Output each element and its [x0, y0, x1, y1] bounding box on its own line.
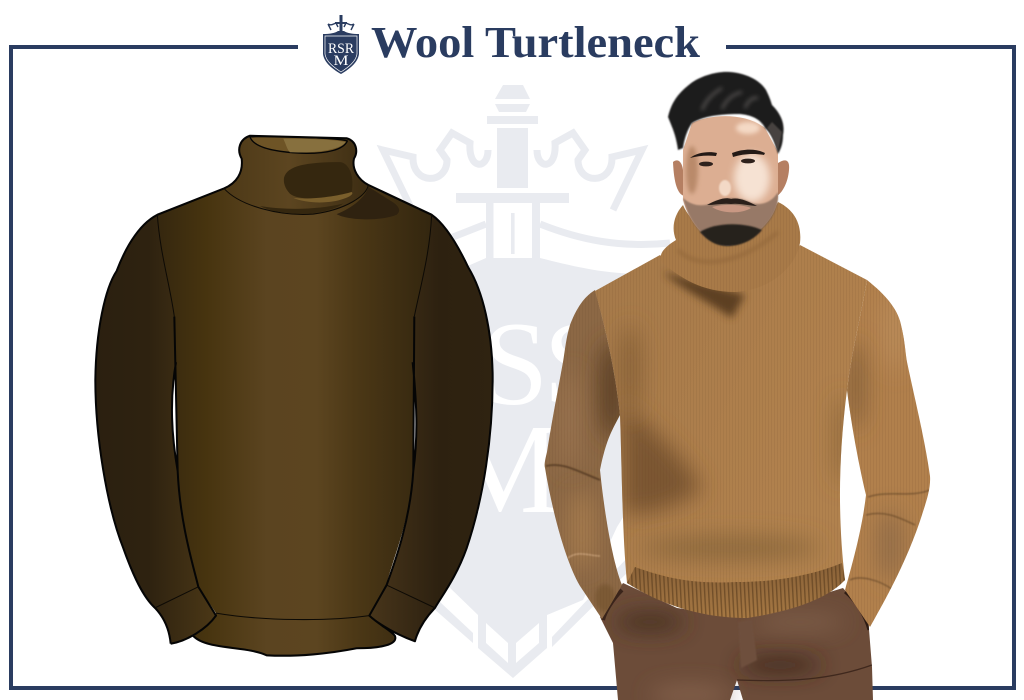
ribbed hem: [627, 563, 845, 618]
icon: RSM shield logo: RSR: [328, 41, 354, 57]
watermark: RSM crest: S: [482, 297, 548, 430]
outline: [95, 136, 493, 656]
torso: [595, 245, 867, 584]
collar opening: [250, 137, 347, 153]
collar shadow: [284, 162, 352, 198]
left sleeve: [95, 215, 216, 644]
icon: RSM shield logo: M: [334, 53, 348, 69]
illustration: wool turtleneck sweater: [95, 136, 493, 656]
watermark: RSM crest: S: [544, 297, 610, 430]
hair: [668, 72, 784, 154]
seam lines: [155, 185, 435, 620]
right sleeve: [369, 215, 493, 641]
turtleneck collar: [661, 202, 800, 292]
shoulder shadow: [337, 187, 399, 219]
face: [683, 116, 778, 246]
collar: [224, 136, 368, 214]
watermark: RSM crest: M: [447, 398, 561, 540]
trousers: [600, 583, 873, 700]
left arm: [544, 290, 622, 619]
icon: RSM shield logo: [323, 15, 359, 74]
right arm: [845, 280, 930, 627]
watermark: RSM crest: [383, 85, 690, 678]
title block: [323, 15, 701, 74]
sweater body: [157, 185, 432, 656]
beard: [683, 192, 778, 246]
brows and eyes: [690, 152, 717, 158]
ears: [673, 160, 789, 196]
heading: Wool Turtleneck: [371, 18, 701, 67]
photo: man wearing camel turtleneck: [540, 72, 935, 700]
